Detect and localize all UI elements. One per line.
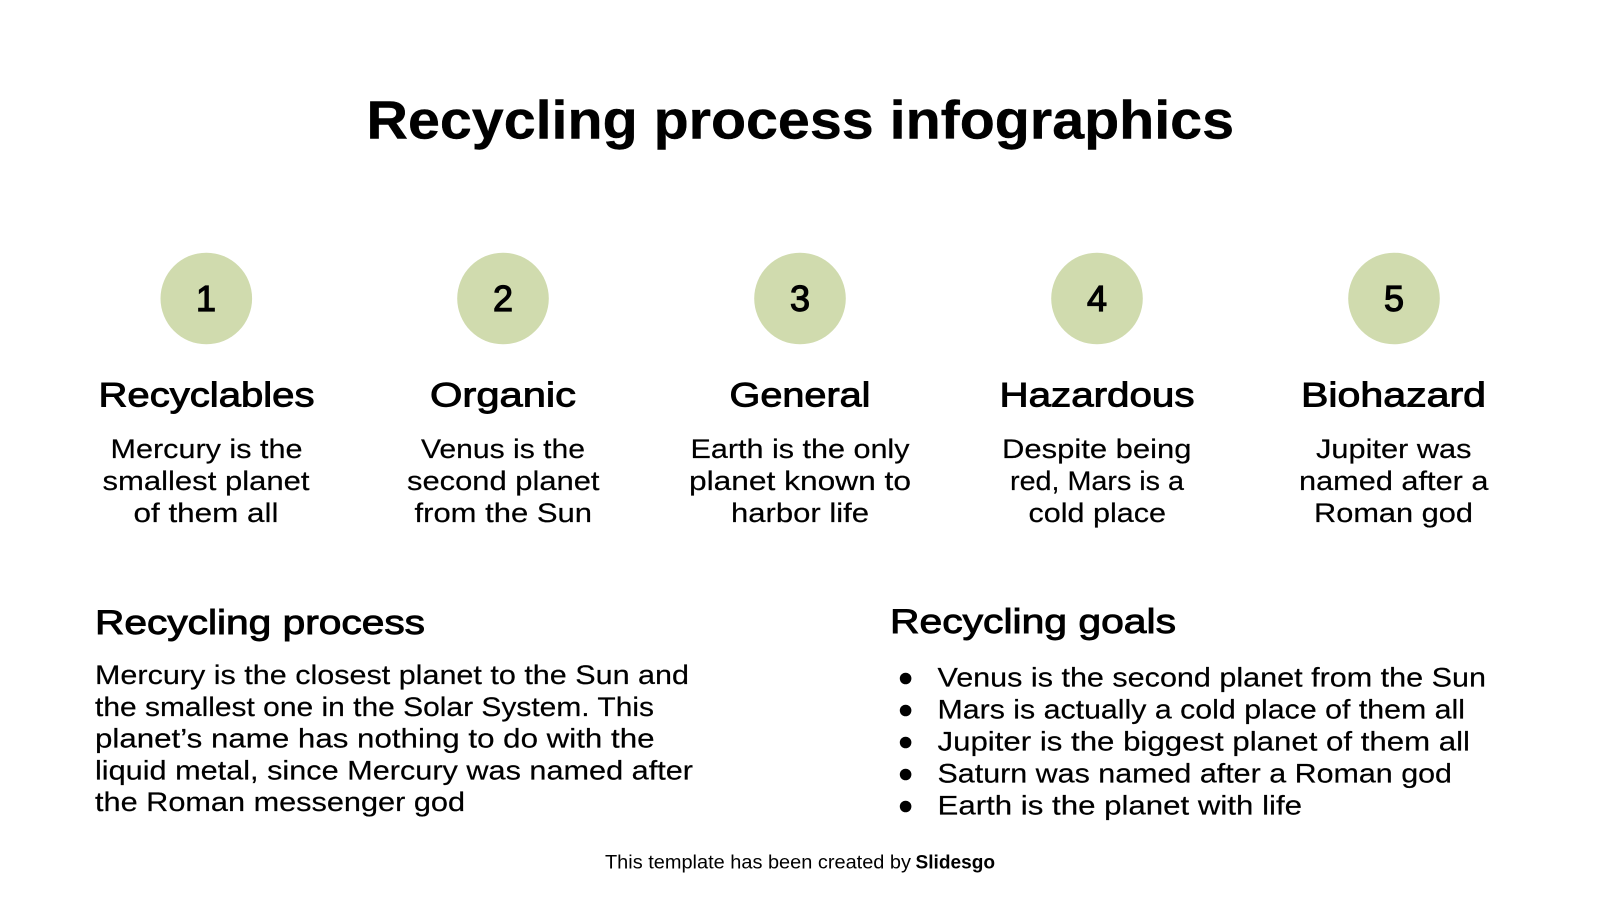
text block: recycling process paragraph: the smallest one in the Solar System. This	[95, 692, 654, 722]
text block: hazardous description: red, Mars is a	[1010, 466, 1185, 496]
title: Recycling process infographics	[366, 90, 1234, 150]
bullet list: recycling goals: Jupiter is the biggest planet of them all	[938, 726, 1470, 756]
text block: organic description: from the Sun	[414, 498, 592, 528]
text block: organic description: second planet	[407, 466, 600, 496]
bullet list: recycling goals	[900, 662, 1486, 820]
bullet list: recycling goals: Saturn was named after a Roman god	[938, 758, 1452, 788]
text block: recyclables description	[102, 434, 310, 528]
icon: number 4 badge: 4	[1087, 278, 1107, 319]
footer credit: Slidesgo	[916, 852, 995, 873]
icon: number 1 badge	[160, 253, 252, 344]
text block: recyclables description: smallest planet	[102, 466, 310, 496]
icon: number 5 badge	[1348, 253, 1440, 344]
icon: number 2 badge	[457, 253, 549, 344]
text block: recyclables description: Mercury is the	[110, 434, 302, 464]
text block: biohazard description: Jupiter was	[1316, 434, 1472, 464]
icon: number 3 badge	[754, 253, 846, 344]
text block: general description: planet known to	[689, 466, 911, 496]
bullet list: recycling goals: Mars is actually a cold place of them all	[938, 694, 1465, 724]
text block: hazardous description: cold place	[1028, 498, 1166, 528]
footer credit: This template has been created by	[605, 852, 912, 873]
icon: number 1 badge: 1	[196, 278, 216, 319]
text block: recycling process paragraph: the Roman messenger god	[95, 787, 465, 817]
text block: organic description	[407, 434, 600, 528]
panel: biohazard	[1299, 253, 1490, 528]
text block: general description: harbor life	[731, 498, 869, 528]
panel: recycling process	[95, 604, 693, 817]
heading: organic: Organic	[430, 376, 576, 414]
text block: general description: Earth is the only	[690, 434, 910, 464]
panel: organic	[407, 253, 600, 528]
text block: recyclables description: of them all	[134, 498, 278, 528]
heading: biohazard: Biohazard	[1301, 376, 1486, 414]
text block: recycling process paragraph: planet’s name has nothing to do with the	[95, 724, 654, 754]
heading: recycling goals: Recycling goals	[890, 603, 1176, 641]
text block: general description	[689, 434, 911, 528]
text block: recycling process paragraph: Mercury is the closest planet to the Sun and	[95, 660, 689, 690]
bullet list: recycling goals: Earth is the planet with life	[938, 790, 1302, 820]
heading: hazardous: Hazardous	[1000, 376, 1194, 414]
panel: recyclables	[98, 253, 314, 528]
panel: hazardous	[1000, 253, 1194, 528]
icon: number 3 badge: 3	[790, 278, 810, 319]
panel: general	[689, 253, 911, 528]
text block: recycling process paragraph: liquid metal, since Mercury was named after	[95, 756, 693, 786]
panel: recycling goals	[890, 603, 1486, 820]
bullet list: recycling goals: Venus is the second planet from the Sun	[938, 662, 1486, 692]
text block: hazardous description	[1002, 434, 1192, 528]
text block: recycling process paragraph	[95, 660, 693, 817]
text block: organic description: Venus is the	[421, 434, 585, 464]
text block: hazardous description: Despite being	[1002, 434, 1192, 464]
text block: biohazard description: Roman god	[1314, 498, 1473, 528]
icon: number 4 badge	[1051, 253, 1143, 344]
text block: biohazard description	[1299, 434, 1490, 528]
heading: recycling process: Recycling process	[95, 604, 425, 642]
text block: biohazard description: named after a	[1299, 466, 1490, 496]
icon: number 2 badge: 2	[493, 278, 513, 319]
icon: number 5 badge: 5	[1384, 278, 1404, 319]
heading: recyclables: Recyclables	[98, 376, 314, 414]
heading: general: General	[730, 376, 870, 414]
